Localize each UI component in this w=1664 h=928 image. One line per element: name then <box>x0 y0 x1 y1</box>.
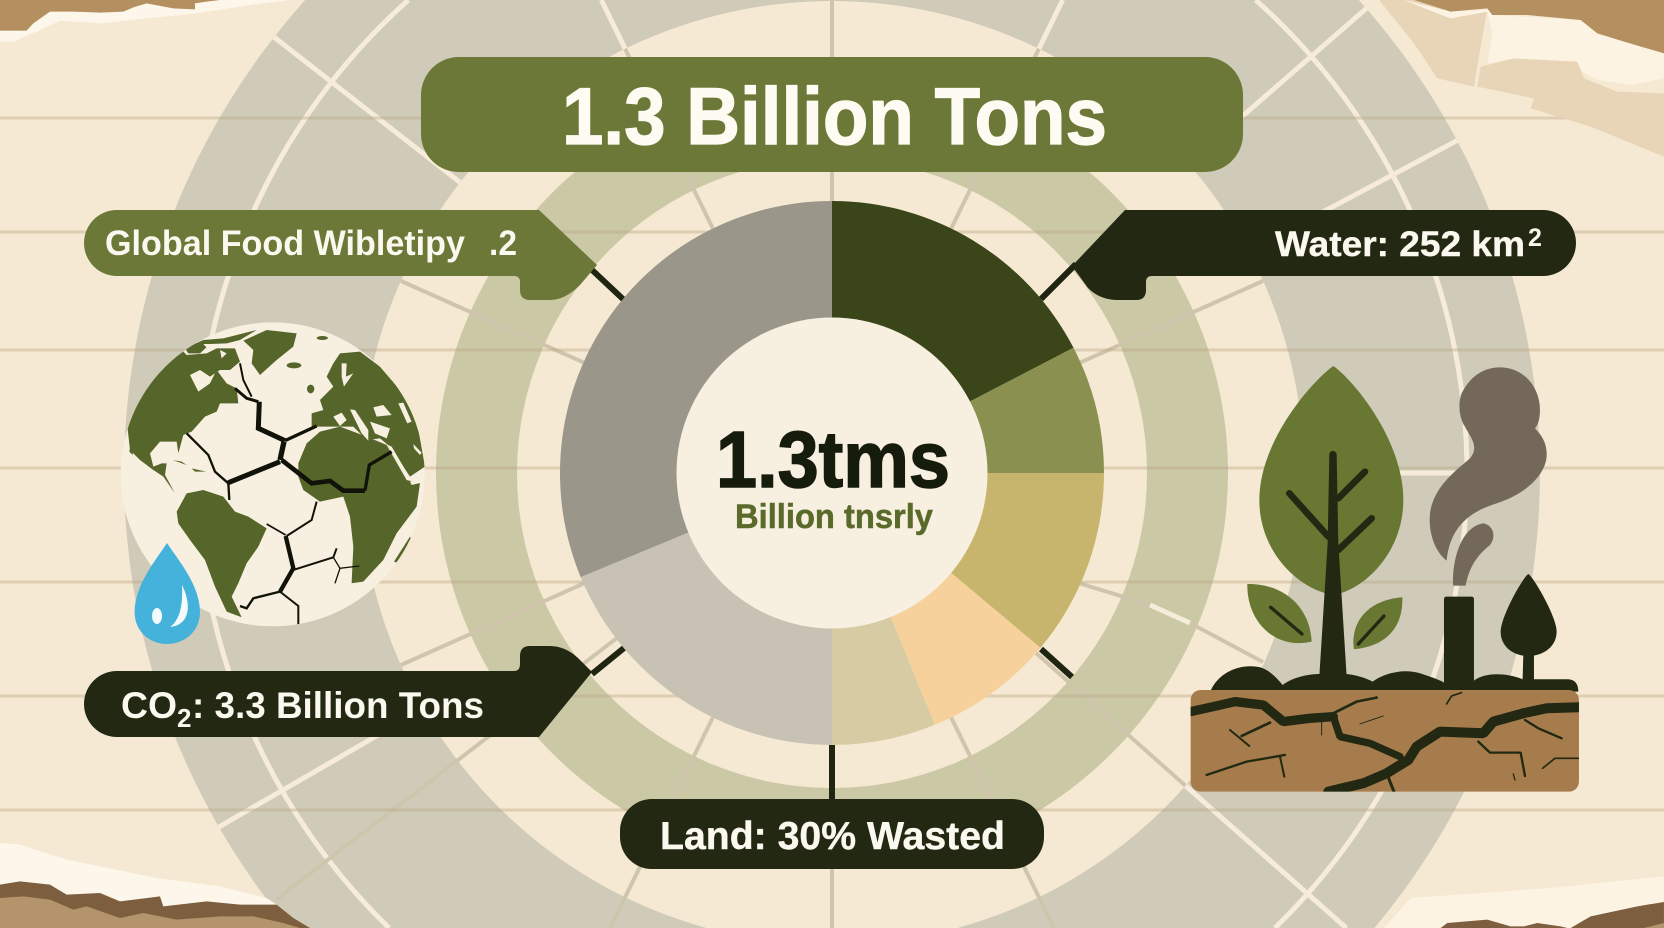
smoke <box>1430 367 1547 586</box>
torn paper corner: bottom left <box>0 843 310 928</box>
torn paper corner: bottom right <box>1384 876 1664 928</box>
callout: water <box>1072 210 1576 300</box>
segment: pale khaki <box>832 473 935 745</box>
center caption: Billion tnsrly <box>735 498 933 536</box>
segment: mustard <box>832 473 1104 648</box>
torn paper corner: top right <box>1379 0 1664 157</box>
segment: olive <box>832 348 1104 473</box>
horizontal paper lines <box>0 118 1664 810</box>
callout: land <box>620 799 1044 869</box>
torn paper corner: top left <box>0 0 290 42</box>
cracks <box>187 363 392 625</box>
small leaves <box>1247 584 1402 649</box>
leaf crown <box>1259 366 1403 595</box>
segment: mid gray <box>560 201 832 577</box>
callout: global food <box>84 210 597 300</box>
continents <box>127 330 425 617</box>
tree trunk and branches <box>1289 451 1372 677</box>
callout number: .2 <box>489 224 517 263</box>
center value: 1.3tms <box>716 415 950 504</box>
donut chart <box>560 201 1104 745</box>
superscript: 2 <box>1528 224 1542 252</box>
water text: Water: 252 km <box>1275 225 1525 264</box>
land text: Land: 30% Wasted <box>660 815 1005 858</box>
callout text: Global Food Wibletipy <box>105 224 466 263</box>
segment: peach <box>832 473 1040 725</box>
icon: tree, smoke and cracked soil <box>1191 366 1579 792</box>
title text: 1.3 Billion Tons <box>562 72 1107 162</box>
icon: water drop <box>135 543 200 644</box>
title banner <box>421 57 1243 172</box>
donut center <box>676 318 988 628</box>
leaf veins <box>1271 607 1384 644</box>
icon: cracked globe <box>121 322 425 626</box>
segment: light gray <box>581 473 832 745</box>
callout: CO2 <box>84 646 592 737</box>
CO2 value: : 3.3 Billion Tons <box>192 685 484 726</box>
CO2 text: CO <box>121 685 177 726</box>
segment: dark green <box>832 201 1074 473</box>
chimney, small tree and mounds <box>1211 597 1578 692</box>
land cutouts <box>203 344 422 485</box>
connector lines <box>590 264 1076 800</box>
subscript: 2 <box>177 703 191 733</box>
cracked soil <box>1191 690 1579 792</box>
